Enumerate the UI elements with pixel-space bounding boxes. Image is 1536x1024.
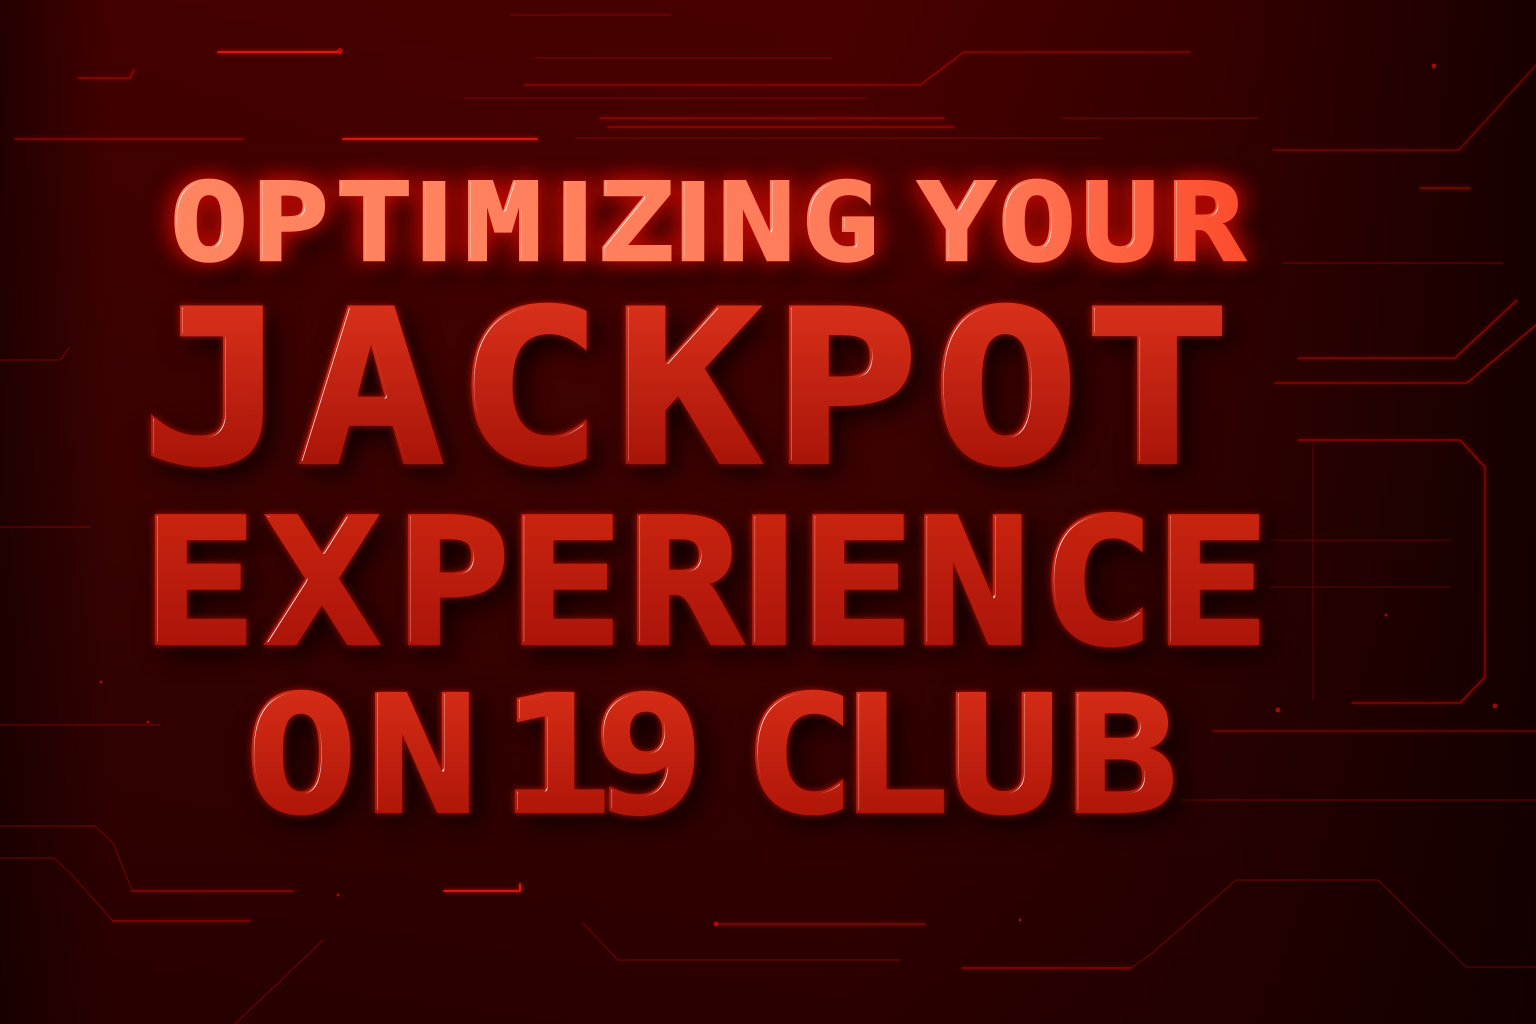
title: jackpot: JACKPOT (141, 265, 1230, 512)
title: on 19 club: ON 19 CLUB (245, 662, 1178, 850)
title: experience: EXPERIENCE (141, 477, 1270, 685)
glints (100, 48, 1498, 926)
title: optimizing your: OPTIMIZING YOUR (170, 159, 1245, 286)
